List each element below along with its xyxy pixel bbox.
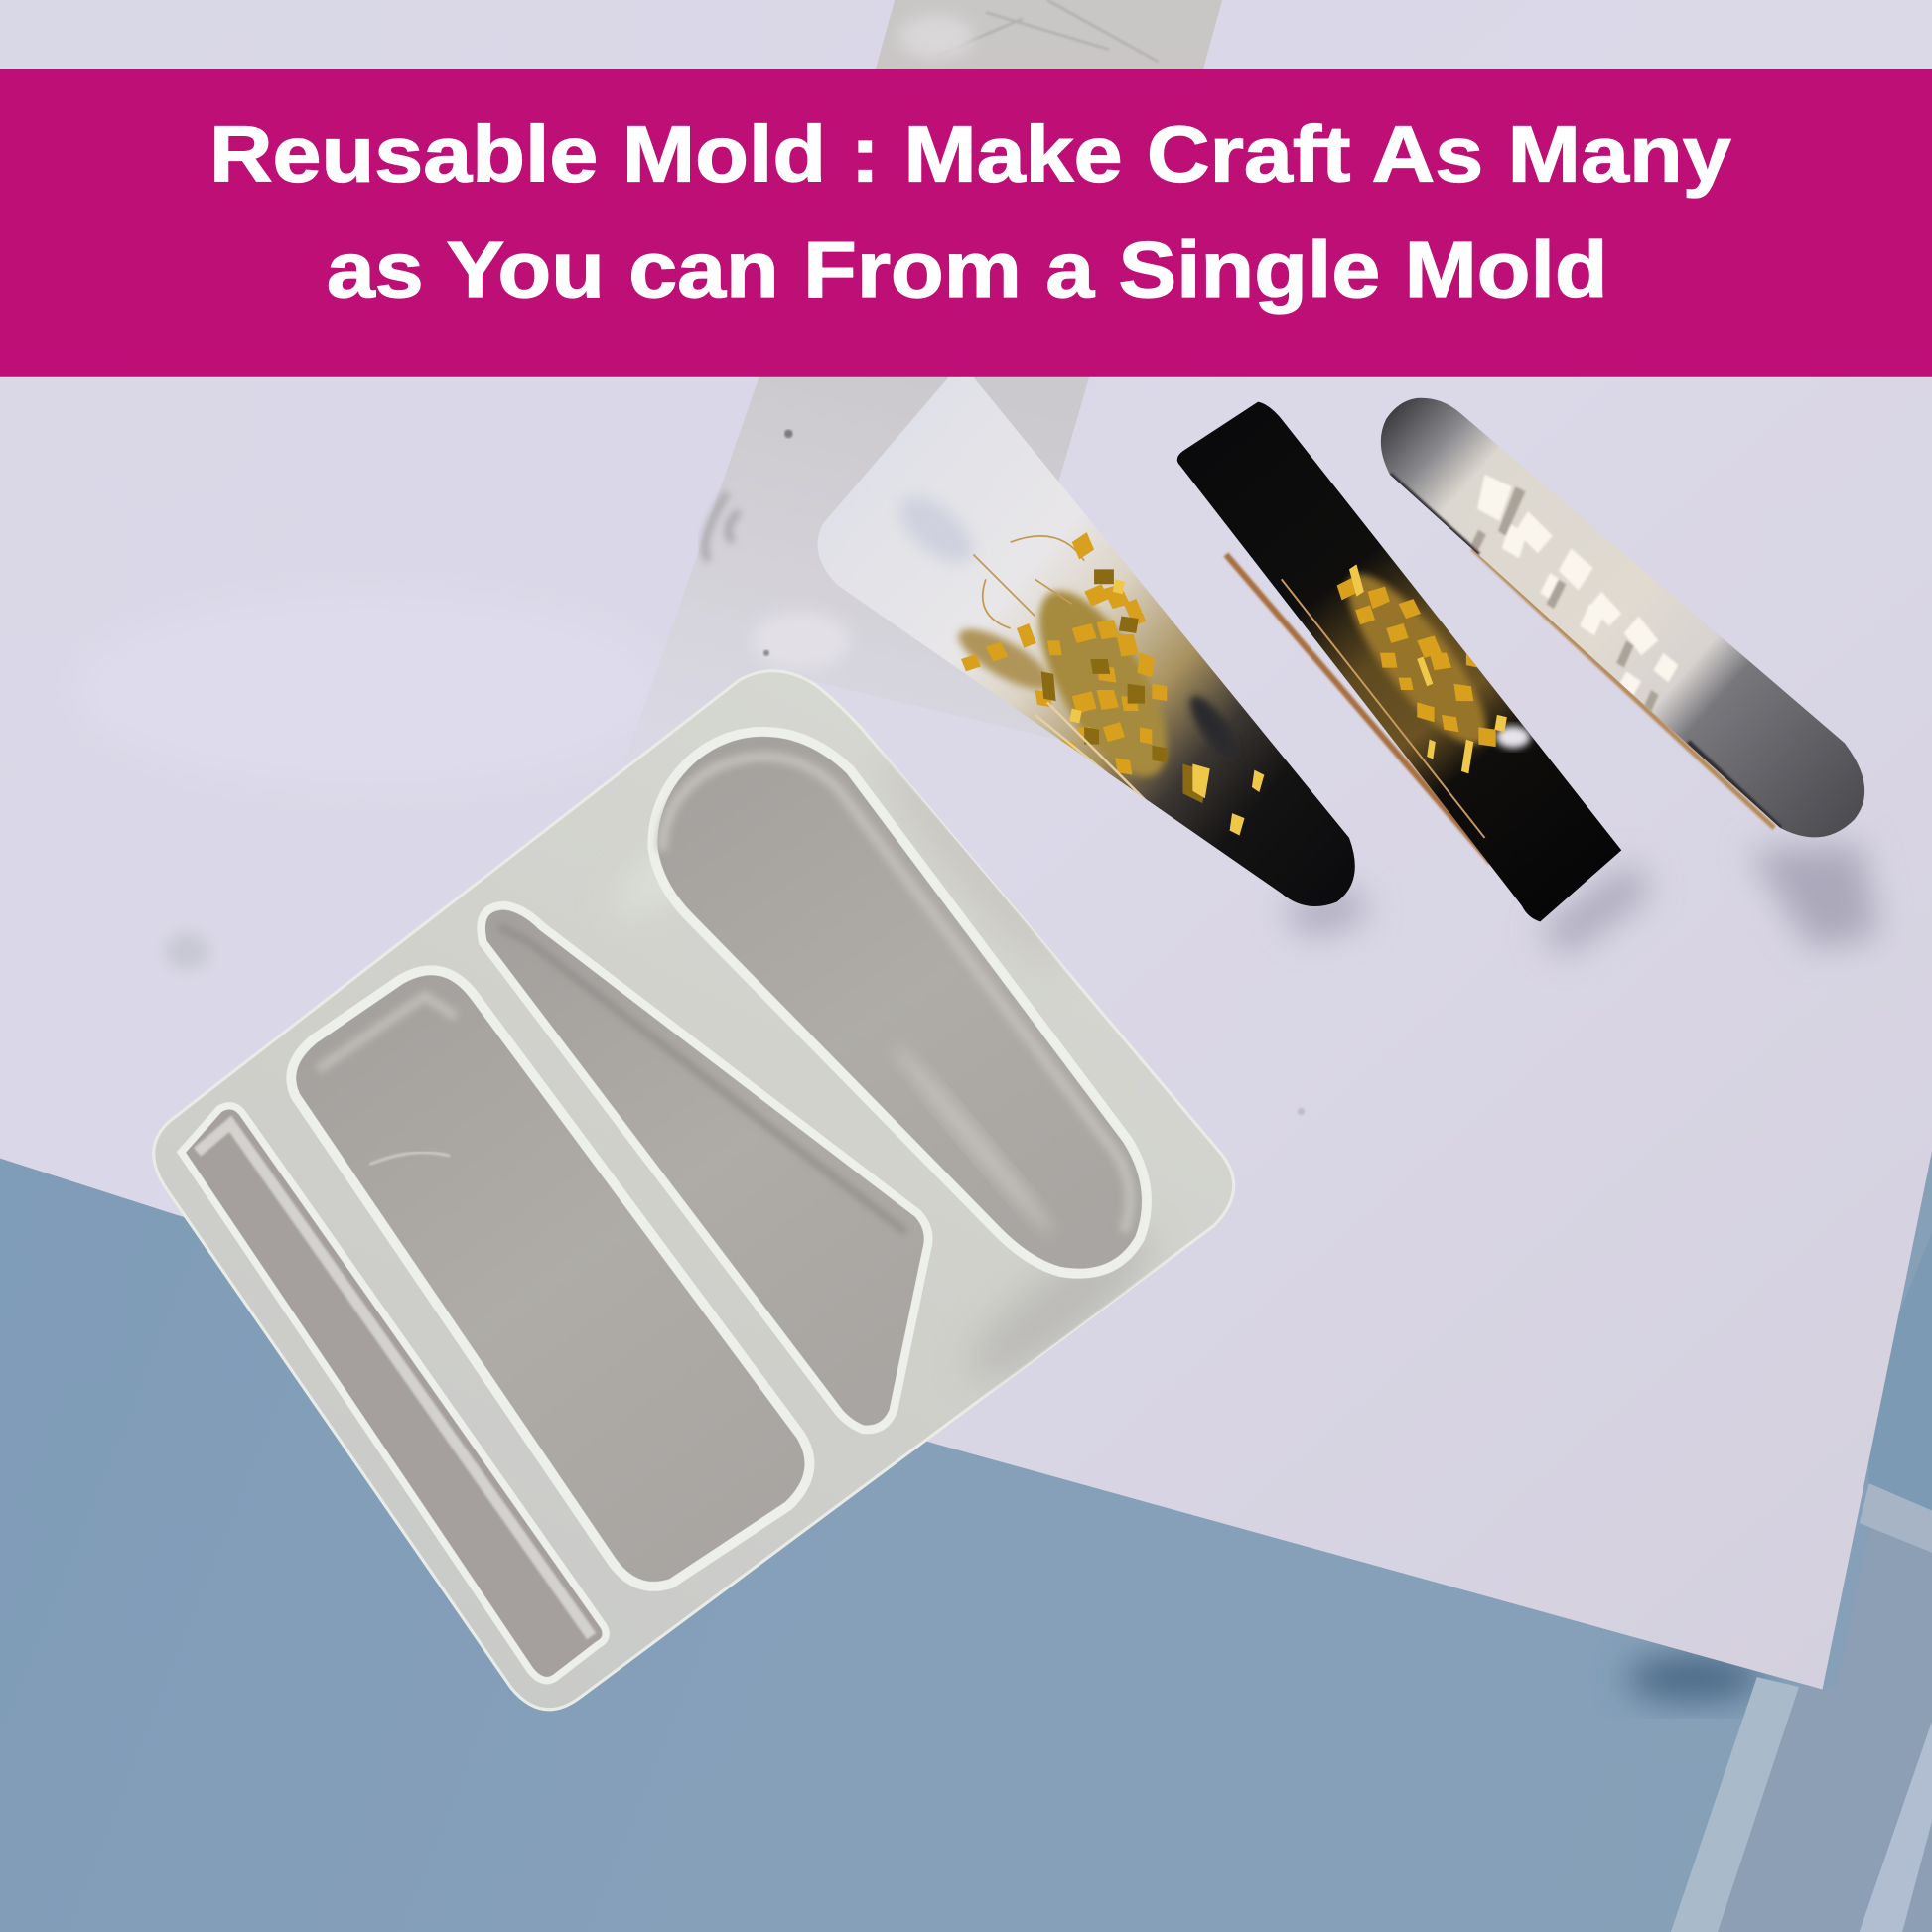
hair clip: grey and pearl rounded bar [1381,398,1864,837]
marble sheet under the clips [623,377,1109,766]
cavity: rounded rectangle [291,970,809,1587]
hair clip: black and gold rectangle [1177,402,1621,921]
clip shadows [1282,844,1879,955]
heading: as You can From a Single Mold [327,225,1608,314]
marble sheet above banner [875,0,1222,71]
silicone mold [154,671,1234,1710]
banner background [0,69,1932,377]
acrylic sheet in the lower right corner [1671,1232,1932,1932]
cavity: large teardrop [652,732,1147,1274]
hair clip: marble and gold teardrop [818,377,1355,906]
paper smudges [73,592,1305,1115]
cavity: narrow bar [181,1106,606,1681]
mold body [154,671,1234,1710]
banner [0,69,1932,377]
heading: Reusable Mold : Make Craft As Many [209,109,1731,198]
heading [209,109,1731,314]
cavity: triangle [482,905,928,1430]
mold surface sheen [641,759,1158,1391]
